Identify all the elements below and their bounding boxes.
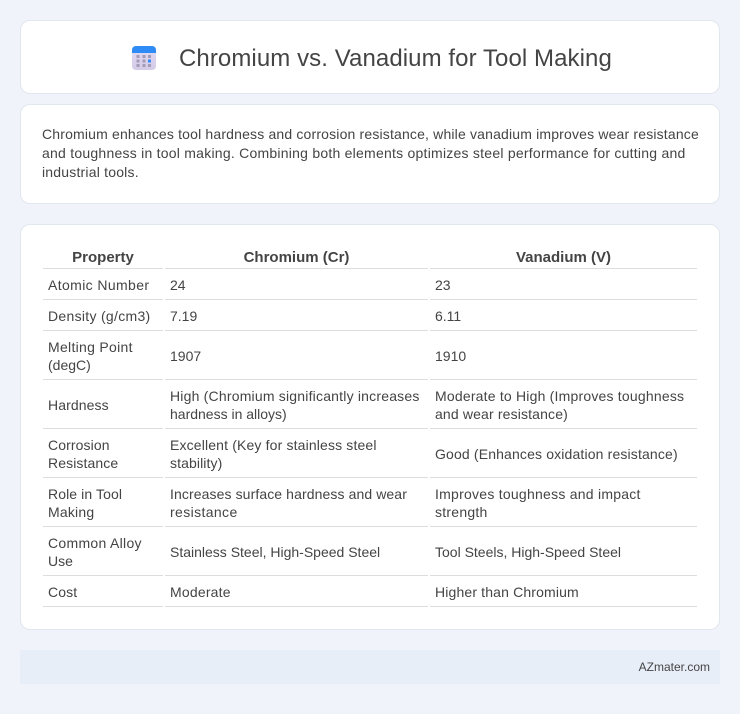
- comparison table: hardness in alloys): [170, 406, 287, 422]
- comparison table: (degC): [48, 357, 91, 373]
- comparison table: 1907: [170, 348, 201, 364]
- comparison table: Property: [72, 249, 134, 266]
- title: Chromium vs. Vanadium for Tool Making: [179, 45, 612, 72]
- comparison table: High (Chromium significantly increases: [170, 388, 420, 404]
- comparison table: Hardness: [48, 397, 109, 413]
- comparison table: 24: [170, 277, 186, 293]
- comparison table: 1910: [435, 348, 466, 364]
- comparison table: strength: [435, 504, 488, 520]
- footer credit: AZmater.com: [639, 660, 710, 674]
- comparison table: [43, 249, 697, 607]
- comparison table: Stainless Steel, High-Speed Steel: [170, 544, 380, 560]
- intro text: Chromium enhances tool hardness and corrosion resistance, while vanadium improves wear resistance: [42, 126, 699, 142]
- comparison table: Tool Steels, High-Speed Steel: [435, 544, 621, 560]
- comparison table: Corrosion: [48, 437, 110, 453]
- comparison table: Cost: [48, 584, 77, 600]
- comparison table: Density (g/cm3): [48, 308, 151, 324]
- intro text: industrial tools.: [42, 164, 139, 180]
- comparison table: Excellent (Key for stainless steel: [170, 437, 377, 453]
- comparison table: 23: [435, 277, 451, 293]
- comparison table: Moderate: [170, 584, 231, 600]
- icon: calendar grid: [132, 46, 156, 70]
- panel: comparison table: [20, 224, 720, 630]
- intro panel: [20, 104, 720, 204]
- comparison table: 7.19: [170, 308, 197, 324]
- header panel: [20, 20, 720, 94]
- comparison table: stability): [170, 455, 222, 471]
- comparison table: Resistance: [48, 455, 118, 471]
- comparison table: Good (Enhances oxidation resistance): [435, 446, 678, 462]
- footer bar: [20, 650, 720, 684]
- comparison table: Use: [48, 553, 73, 569]
- comparison table: Improves toughness and impact: [435, 486, 641, 502]
- intro text: and toughness in tool making. Combining both elements optimizes steel performance for cutting and: [42, 145, 686, 161]
- comparison table: Atomic Number: [48, 277, 149, 293]
- comparison table: 6.11: [435, 308, 461, 324]
- comparison table: Common Alloy: [48, 535, 142, 551]
- comparison table: Making: [48, 504, 94, 520]
- comparison table: Moderate to High (Improves toughness: [435, 388, 684, 404]
- comparison table: Melting Point: [48, 339, 133, 355]
- comparison table: and wear resistance): [435, 406, 568, 422]
- comparison table: Role in Tool: [48, 486, 122, 502]
- comparison table: Higher than Chromium: [435, 584, 579, 600]
- comparison table: Increases surface hardness and wear: [170, 486, 407, 502]
- comparison table: resistance: [170, 504, 238, 520]
- comparison table: Chromium (Cr): [244, 249, 349, 266]
- intro text: [42, 126, 699, 180]
- comparison table: Vanadium (V): [516, 249, 611, 266]
